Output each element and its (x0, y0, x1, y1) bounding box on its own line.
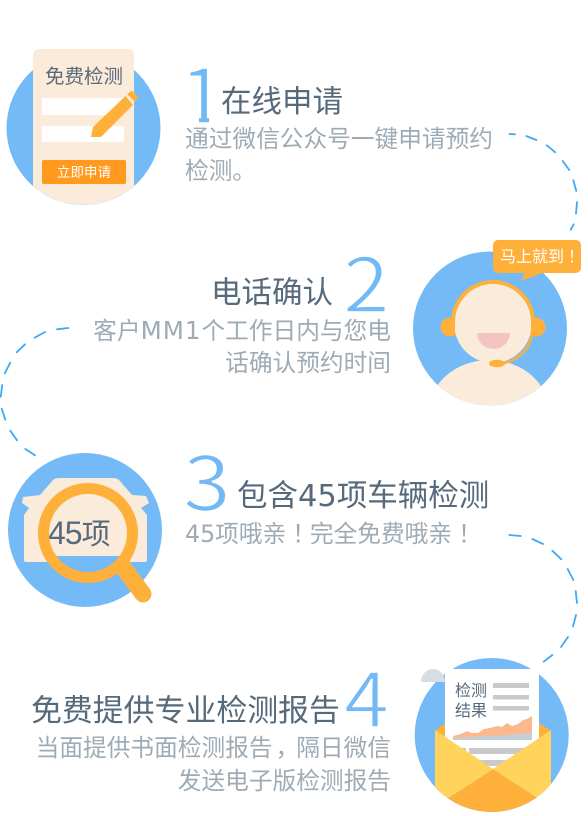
text block: step 2: 话确认预约时间 (225, 349, 391, 377)
heading: step 4: 免费提供专业检测报告 (31, 693, 340, 729)
icon: report in envelope: 结果 (455, 701, 487, 720)
text block: step 2 (93, 316, 391, 377)
text block: step 1: 通过微信公众号一键申请预约 (185, 125, 493, 153)
arrow: dashed connector step 1 to 2 (509, 134, 577, 230)
panel: step 2 (94, 240, 581, 406)
heading: step 3: 包含45项车辆检测 (237, 479, 489, 514)
icon: application form: 免费检测 (45, 65, 123, 88)
icon: customer service agent (413, 240, 581, 406)
icon: car under magnifier: 45项 (48, 515, 111, 551)
number: 4: 4 (344, 641, 389, 749)
panel: step 1 (6, 36, 493, 205)
callout: speech bubble: 马上就到！ (500, 247, 584, 266)
number: 2: 2 (343, 225, 390, 334)
panel: step 3 (8, 424, 489, 607)
callout: speech bubble (493, 240, 584, 281)
text block: step 4 (36, 734, 391, 795)
text block: step 4: 发送电子版检测报告 (178, 767, 391, 795)
icon: application form: 立即申请 (57, 165, 111, 181)
icon: report in envelope: 检测 (455, 681, 487, 700)
text block: step 3: 45项哦亲 ！完全免费哦亲 ！ (185, 520, 482, 548)
arrow: dashed connector step 3 to 4 (509, 535, 577, 662)
heading: step 1: 在线申请 (221, 85, 343, 120)
text block: step 4: 当面提供书面检测报告，隔日微信 (36, 734, 391, 762)
text block: step 2: 客户MM1个工作日内与您电 (93, 316, 391, 345)
number: 1: 1 (180, 36, 225, 145)
number: 3: 3 (183, 424, 231, 533)
icon: application form (6, 49, 160, 205)
heading: step 2: 电话确认 (211, 276, 333, 311)
panel: step 4 (32, 658, 569, 812)
icon: car under magnifier (8, 453, 162, 607)
text block: step 1 (185, 125, 493, 185)
arrow: dashed connector step 2 to 3 (1, 328, 68, 455)
text block: step 1: 检测。 (185, 157, 256, 185)
icon: report in envelope (415, 658, 569, 816)
